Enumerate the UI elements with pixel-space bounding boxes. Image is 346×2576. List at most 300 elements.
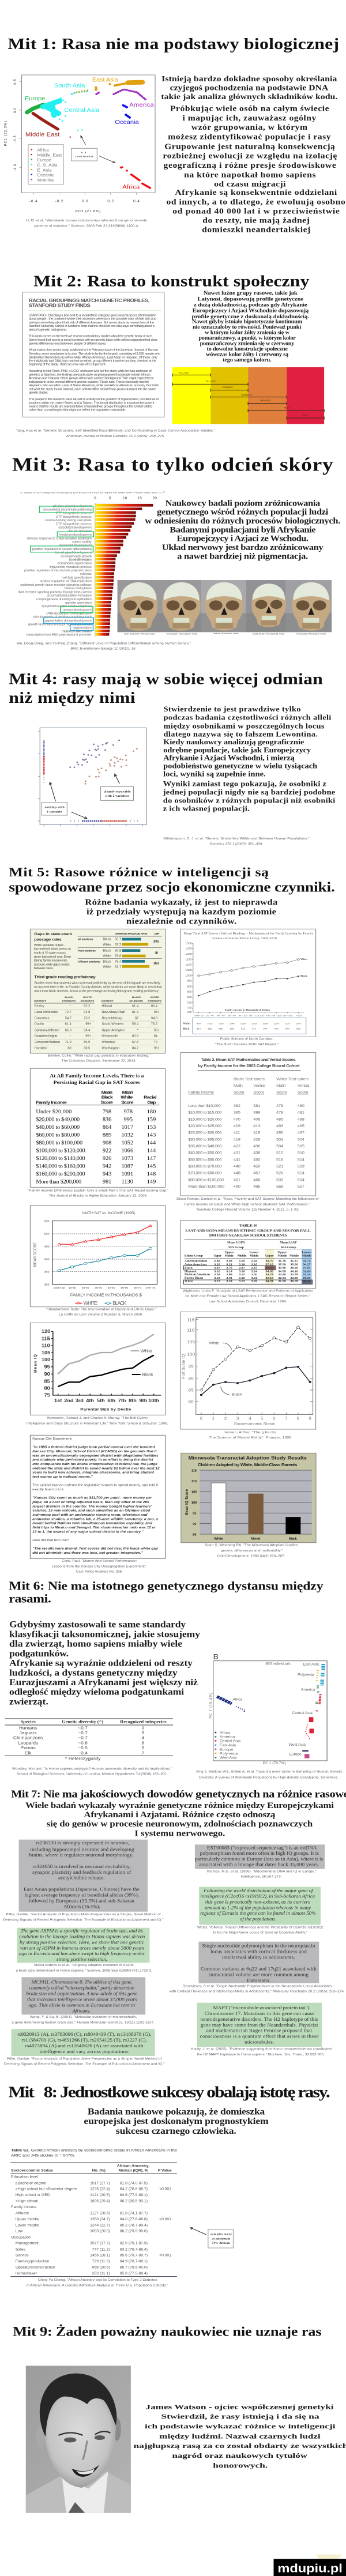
panel: Mean IQ by parental SES decile: 10th [148, 1398, 159, 1403]
table: African ancestry by socioeconomic status: 1456 (28.1) [90, 2254, 110, 2258]
panel: Gaps in state-exam passage rates: 80.6 [132, 1035, 138, 1038]
citation: Dixon-Román, Ezekiel et al. "Race, Poverty and SAT Scores: Modeling the Influences of [176, 1197, 319, 1201]
citation: Ching-Yu Cheng. "African Ancestry and Its Correlation to Type 2 Diabetes [38, 2279, 157, 2282]
panel: Stanford article: American and Hispanic ethnic groups often have a mixed background. "We might expect these [29, 377, 154, 381]
citation: Tang, Hua et al. "Genetic Structure, Self-Identified Race/Ethnicity, and Confounding in Case-Control Association Studies." [16, 430, 215, 433]
panel: North Carolina SAT line chart: 1119 [285, 1022, 290, 1025]
chart: colour continuum: RED? [284, 406, 291, 409]
panel: Table 2 SAT scores by income: 534 [298, 1178, 304, 1182]
panel: SAT gap by family income: 153 [147, 1125, 156, 1131]
panel: Stanford article [22, 292, 164, 417]
panel: Table 2 SAT scores by income: 519 [298, 1165, 304, 1169]
citation: Child Development. 1983;54(2):260–267. [217, 1555, 285, 1558]
panel: North Carolina SAT line chart: 941 [252, 1027, 256, 1030]
panel: Full scale IQ by socioeconomic status: 100 [187, 1352, 195, 1357]
text block: od czasu migracji [214, 180, 286, 189]
callout: no continuum: no [81, 151, 86, 153]
panel: ASPM: The gene ASPM is a specific regulator of brain size, and its [21, 1928, 144, 1933]
chart: GO categories bar chart: growth factor beta receptor signaling pathway [28, 623, 92, 626]
panel: North Carolina SAT line chart: White [300, 958, 308, 961]
text block: od innych, a to dlatego, że ewoluują osobno [167, 198, 345, 206]
panel: Gaps in state-exam passage rates: 61.4 [65, 1023, 72, 1026]
panel: Mean IQ by parental SES decile: 120 [42, 1329, 50, 1334]
citation [46, 1308, 156, 1317]
text block: niezależnie od czynników. [126, 917, 236, 926]
panel: Gaps in state-exam passage rates: White [103, 955, 111, 958]
panel: LSAT and UGPA table: 29.91 [303, 1276, 311, 1280]
citation [164, 837, 309, 846]
panel: Gaps in state-exam passage rates: 91.7 [115, 966, 121, 969]
panel: Table 2 SAT scores by income: 504 [276, 1144, 283, 1148]
panel: SAT gap by family income: Score [121, 1100, 134, 1105]
panel: ASPM: evolution in the lineage leading to Homo sapiens was driven [19, 1934, 145, 1939]
chart: GO categories bar chart: epidermal growth factor receptor signaling pathway [20, 583, 92, 587]
text block: Nawet gdyby istniało hipotetyczne kontinuum [192, 319, 302, 325]
table: African ancestry by socioeconomic status: 729 (11.3) [92, 2259, 110, 2264]
panel: MAPT: Chromosome 17. Mutations in this gene can cause [205, 2011, 314, 2016]
panel: North Carolina SAT line chart: 947 [263, 1027, 267, 1030]
panel: Math SAT vs income: WHITE [84, 1301, 97, 1306]
chart: Minnesota Transracial Adoption Study: 115 [191, 1470, 197, 1472]
panel: SAT gap by family income: 144 [147, 1140, 156, 1146]
panel: Gaps in state-exam passage rates: account, wide gaps persist [34, 963, 70, 966]
citation: "Standardized Tests: The Interpretation of Racial and Ethnic Gaps." [46, 1308, 156, 1311]
panel: Table 2 SAT scores by income: 490 [234, 1185, 240, 1189]
panel: C2orf16: intelligence (C2orf16 rs191912), in Sub-Saharan Africa [200, 1893, 315, 1899]
chart: GO categories bar chart: 20 [153, 496, 157, 500]
table: African ancestry by socioeconomic status: Upper middle [16, 2217, 39, 2221]
panel: Math SAT vs income: FAMILY INCOME IN THOUSANDS $ [70, 1293, 142, 1297]
panel: Kansas City Experiment: swimming pool with an underwater viewing room, television and [32, 1513, 148, 1517]
text block: Układ nerwowy jest bardzo zróżnicowany [162, 543, 324, 552]
panel: rs236330 [19, 1840, 148, 1912]
panel: Stanford article: genetic differences exist between people of different races. [29, 342, 106, 345]
text block: na które napotkał homo sapiens [184, 171, 316, 179]
panel: Gaps in state-exam passage rates: Third-grade reading proficiency [34, 975, 96, 980]
panel: LSAT and UGPA table: 3.29 [251, 1280, 257, 1283]
text block [163, 705, 335, 812]
panel: Gaps in state-exam passage rates: Reynoldsburg [101, 1017, 122, 1020]
text block: w odniesieniu do różnych procesów biologicznych. [145, 517, 341, 526]
panel: SAT gap by family income: $40,000 to $60,000 [36, 1125, 80, 1131]
citation: patterns of variation." Science. 2008 Feb 22;319(5866):1100-4. [34, 225, 139, 228]
panel: Kansas City Experiment: animation studios, a robotics lab, a 25-acre wildlife sanctuary, a zoo, a [32, 1517, 159, 1521]
callout [100, 786, 134, 800]
panel: Math SAT vs income: 500 [44, 1233, 50, 1236]
table: African ancestry by socioeconomic status: 263 (11.1) [92, 2272, 110, 2276]
panel: SAT gap by family income: Family Income [36, 1100, 67, 1105]
panel: Gaps in state-exam passage rates: WHITE [83, 996, 92, 999]
panel: SAT gap by family income: $20,000 to $40,000 [36, 1117, 80, 1123]
panel: Stanford article: What makes the current study, published in the February issue of the American Journal of Human [29, 349, 158, 352]
panel: Gaps in state-exam passage rates: 70 [154, 1041, 157, 1044]
panel: Table 2 SAT scores by income: 485 [276, 1118, 283, 1121]
panel: Stanford article: genetic cluster. [29, 391, 48, 395]
panel: LSAT and UGPA table: 34.31 [266, 1280, 273, 1283]
panel: Mean IQ by parental SES decile: 9th [139, 1398, 147, 1403]
panel: Kansas City Experiment: ordered the state and district to spend nearly $2 billion over the next 12 [32, 1467, 160, 1470]
citation [191, 2048, 332, 2057]
panel: Table 2 SAT scores by income: Math [276, 1083, 285, 1088]
panel: North Carolina SAT line chart: 1069 [240, 1022, 246, 1025]
panel: Table 2 SAT scores by income: 426 [253, 1138, 261, 1142]
chart: GO categories bar chart: positive regulation of microtubule polymerization [24, 569, 92, 573]
panel: LSAT and UGPA table: 34.55 [278, 1270, 286, 1273]
citation [52, 1560, 147, 1574]
table: African ancestry by socioeconomic status: 1517 (27.7) [90, 2182, 110, 2185]
text block: domieszki neandertalskiej [202, 226, 310, 234]
panel: rs236330: rs324650 is involved in neuronal excitability, [33, 1864, 131, 1869]
panel: North Carolina SAT line chart: 800 [187, 996, 192, 999]
title: Mit 5: spowodowane przez socjo ekonomiczne czynniki. [9, 879, 335, 895]
table: African ancestry by socioeconomic status: 85.8 (77.5-89.4) [120, 2272, 148, 2276]
table: African ancestry by socioeconomic status: 82.5 (75.1-87.9) [120, 2242, 148, 2246]
chart: PCA scatter B: America [301, 1688, 315, 1692]
panel: MAPT: microtubules. [245, 2039, 274, 2044]
citation: Teachers College Record Volume 115 Number 4, 2013, p. 1-33. [196, 1208, 299, 1212]
citation: Witherspoon, D. J. et al. "Genetic Similarities Within and Between Human Populations." [164, 837, 309, 841]
panel: Gaps in state-exam passage rates: Black [103, 938, 111, 941]
citation: Detecting Signals of Recent Polygenic Selection: The Example of Educational Attainment and IQ." [4, 2063, 164, 2066]
panel: Kansas City Experiment: years to build new schools, integrate classrooms, and bring student [32, 1471, 155, 1475]
text block: honorowych. [213, 2461, 268, 2469]
panel: Gaps in state-exam passage rates: Whitehall [101, 1041, 115, 1044]
text block: profile genetyczne z doskonalą dokładnością. [192, 314, 310, 320]
table: species diversity: 7 [142, 1750, 144, 1756]
panel: LSAT and UGPA table: 3.19 [239, 1263, 245, 1267]
panel: Stanford article: Hispanics who are often a mix of Native American, white and African-American ancestry. But that's [29, 384, 159, 387]
panel: Math SAT vs income: under 10 [54, 1286, 65, 1289]
title: Mit 7: Mit 7: Nie ma jakościowych dowodów genetycznych na różnice rasowe [11, 1788, 346, 1800]
legend: Europe [37, 157, 51, 163]
chart: PCA scatter of world populations: South Asia [54, 83, 85, 89]
table: African ancestry by socioeconomic status: 85.2 (78.7-89.4) [120, 2224, 148, 2227]
chart: GO categories bar chart: triglyceride metabolic process [50, 566, 92, 569]
citation: American Journal of Human Genetics 76.2 (2005): 268–275. [66, 435, 165, 438]
panel: LSAT and UGPA table: Ethnic Group [185, 1255, 203, 1257]
panel: Kansas City Experiment: did not diminish; and there was less, not greater, integration." [32, 1551, 143, 1555]
panel: Full scale IQ by socioeconomic status: 0 [200, 1416, 203, 1421]
panel: Math SAT vs income: 450 [44, 1245, 50, 1248]
text block: Różne badania wykazały, iż jest to nieprawda [85, 898, 277, 907]
panel: SAT gap by family income: Mean [101, 1090, 112, 1095]
citation [16, 1964, 152, 1973]
chart: PCA scatter of world populations: PC1 (52.3%) [3, 121, 8, 146]
text block: do reszty, nie mają żadnej [202, 217, 310, 225]
citation [16, 430, 215, 438]
panel: Full scale IQ by socioeconomic status: 6 [273, 1416, 276, 1421]
chart: Minnesota Transracial Adoption Study: 110 [191, 1480, 197, 1483]
panel: Kansas City Experiment [30, 1435, 166, 1558]
panel: LSAT and UGPA table: 2.99 [226, 1273, 232, 1276]
panel: LSAT and UGPA table: 3.03 [214, 1276, 220, 1280]
panel: LSAT and UGPA table: 3.14 [251, 1270, 257, 1273]
citation: Intelligence and Class Structure in American Life." New York: Simon & Schuster, 1996. [27, 1422, 168, 1425]
panel: C2orf16 [199, 1887, 321, 1925]
panel: LSAT and UGPA table: 2.87 [214, 1267, 220, 1270]
citation: Herrnstein, Richard J, and Charles A. Murray. "The Bell Curve: [47, 1417, 148, 1420]
title: Mit 6: rasami. [9, 1592, 51, 1605]
panel: LSAT and UGPA table: 3.08 [214, 1273, 220, 1276]
text block: z dużą dokładnością, podczas gdy Afrykanie [194, 302, 307, 308]
image: portrait of James Watson [26, 2366, 131, 2513]
table: African ancestry by socioeconomic status: Occupation [11, 2236, 31, 2239]
panel: LSAT and UGPA table [180, 1221, 316, 1289]
panel: LSAT and UGPA table: 2.94 [251, 1260, 257, 1263]
text block [25, 1801, 334, 1838]
citation: Family Income on Black and White High School Students' SAT Performance." [185, 1203, 310, 1206]
panel: Table 2 SAT scores by income: 413 [253, 1124, 261, 1128]
legend: Europe [220, 1748, 233, 1752]
panel: Gaps in state-exam passage rates: Black [103, 961, 111, 963]
panel: rs236330: followed by Europeans (35.5%) and sub-Saharan [29, 1898, 135, 1903]
panel: Table 2 SAT scores by income: 400 [234, 1118, 240, 1121]
callout: no continuum [72, 148, 97, 161]
table: species diversity: 8 [142, 1741, 145, 1745]
chart: GO categories bar chart: 10 [123, 496, 127, 500]
table: African ancestry by socioeconomic status: 84.0 (77.8-88.8) [120, 2217, 148, 2221]
panel: LSAT and UGPA table: Middle [238, 1255, 247, 1257]
panel: Gaps in state-exam passage rates: Hilliard [101, 1005, 112, 1008]
citation: Binkley, Collin. "Wide racial gap persists in education testing." [48, 1054, 151, 1057]
panel: North Carolina SAT line chart: 1149 [296, 1022, 301, 1025]
panel: Stanford article: perhaps something about their risk of different diseases. But a new study by researchers at the [29, 321, 154, 325]
panel: LSAT and UGPA table: Upper- [277, 1251, 287, 1255]
panel: North Carolina SAT line chart: 973 [274, 1027, 279, 1030]
panel: Table 2 SAT scores by income: 488 [298, 1118, 304, 1121]
citation: Detecting Signals of Recent Polygenic Selection: The Example of Educational Attainment and IQ." [3, 1919, 164, 1922]
title: Mit 6 [9, 1579, 324, 1605]
chart: Minnesota Transracial Adoption Study: Mean IQ Score [185, 1489, 189, 1515]
chart: GO categories bar chart: gamete generation [65, 601, 92, 605]
panel: Full scale IQ by socioeconomic status: White [209, 1341, 219, 1346]
citation: Piffer, Davide. "Factor Analysis of Population Allele Frequencies as a Simple, Novel Method of [7, 2058, 161, 2061]
chart: PCA scatter of world populations: 0.5 [13, 79, 17, 85]
text block: podgatunków. [9, 1648, 69, 1659]
panel: Mean IQ by parental SES decile: 2nd [64, 1398, 74, 1403]
image: five skulls: European Caucasian male [167, 632, 198, 635]
text block: podobieństwo genetyczne w wielu tysiącach [163, 762, 318, 770]
chart: PCA scatter of world populations: Middle East [25, 132, 59, 138]
chart: PCA scatter B: Central Asia [292, 1711, 313, 1715]
panel: Mean IQ by parental SES decile [30, 1323, 166, 1415]
panel: Full scale IQ by socioeconomic status: Full Scale IQ [181, 1354, 186, 1379]
text block: od ponad 40 000 lat i w przeciwieństwie [172, 208, 340, 216]
panel: LSAT and UGPA table: 32.15 [266, 1276, 273, 1280]
panel: SAT gap by family income: Under $20,000 [36, 1109, 72, 1115]
panel: LSAT and UGPA table: 27.51 [303, 1267, 311, 1270]
panel: Gaps in state-exam passage rates: formed their black peers on [34, 948, 71, 951]
panel: Table 2 SAT scores by income: $20,000 to $25,000 [188, 1124, 222, 1128]
chart: PCA scatter of world populations: -0.4 [29, 199, 37, 204]
panel: Mean IQ by parental SES decile: 5th [97, 1398, 105, 1403]
title: Mit 8: Mit 8: Jednostkowe sukcesy obalają istotę rasy. [9, 2083, 330, 2101]
table: African ancestry by socioeconomic status: 1121 (20.5) [90, 2193, 110, 2197]
table: African ancestry by socioeconomic status: Education level [11, 2175, 38, 2179]
table: African ancestry by socioeconomic status: P Value [158, 2169, 172, 2173]
panel: North Carolina SAT line chart: 750 [187, 1001, 192, 1004]
text block: Naukowcy badali poziom zróżnicowania [166, 499, 321, 508]
panel: LSAT and UGPA table: 2.87 [239, 1267, 245, 1270]
text block: Wiele badań wykazały wyraźnie genetyczne różnice między Europejczykami [25, 1801, 334, 1810]
panel: LSAT and UGPA table: 33.80 [278, 1273, 286, 1276]
panel: North Carolina SAT line chart: 999 [197, 1022, 201, 1025]
panel: SAT gap by family income: More than $200,000 [36, 1179, 81, 1185]
text block: Grupowanie jest naturalną konsekwencją [164, 142, 336, 151]
panel: SAT gap by family income: $60,000 to $80,000 [36, 1132, 80, 1138]
panel: SAT gap by family income [30, 1068, 166, 1187]
panel: Table 2 SAT scores by income: Score [298, 1090, 309, 1095]
text block: dlatego nazywa się to fałszem Lewontina. [164, 730, 318, 738]
callout: samples were at minimum 74% African: at minimum [212, 2238, 231, 2240]
arrow [99, 156, 115, 163]
panel: Table 2 SAT scores by income: 448 [234, 1172, 240, 1176]
panel: Table 2 SAT scores by income: 493 [276, 1124, 283, 1128]
chart: colour continuum: ORANGE? [222, 386, 234, 389]
panel: Table 2 SAT scores by income: Less than $10,000 [188, 1104, 221, 1108]
text block: czyjegoś pochodzenia na podstawie DNA [170, 84, 329, 92]
panel: ASPM: by strong positive selection. Here, we show that one genetic [20, 1939, 144, 1945]
text block: ludzkości, a dystans genetyczny między [9, 1667, 178, 1678]
panel: LSAT and UGPA table: 2.87 [251, 1267, 257, 1270]
chart: colour continuum: YELLOW? [178, 371, 190, 374]
panel: Kansas City Experiment: "Kansas City spent as much as $11,700 per pupil - more money per [32, 1496, 152, 1500]
panel: Stanford article: means that the results are representative of racial/ethnic groups throughout the United States [29, 405, 152, 409]
chart: PCA scatter B: Polynesia [298, 1673, 314, 1677]
panel: Gaps in state-exam passage rates: Hamilton [35, 1047, 47, 1050]
chart: PCA scatter B: PC 1 (78.7%) [263, 1761, 286, 1765]
panel: SAT gap by family income: $160,000 to $200,000 [36, 1172, 85, 1177]
panel: Gaps in state-exam passage rates: 95+ [85, 1035, 91, 1038]
panel: SAT gap by family income: 1032 [121, 1132, 133, 1138]
citation [12, 1768, 172, 1776]
panel: SAT gap by family income: $80,000 to $100,000 [36, 1140, 82, 1146]
panel: North Carolina SAT line chart: 700 [187, 1007, 192, 1010]
text block: możesz zidentyfikować populacje i rasy [168, 133, 331, 141]
legend: Oceania [37, 172, 54, 178]
text block: dla zwierząt, homo sapiens miałby wiele [9, 1639, 182, 1649]
panel: LSAT and UGPA table: American Indian [185, 1260, 207, 1263]
table: African ancestry by socioeconomic status: <0.001 [159, 2217, 171, 2221]
chart: GO categories bar chart: pigmentation during development [45, 619, 92, 623]
citation: Lessons from the Kansas City Desegregation Experiment". [52, 1565, 147, 1568]
table: species diversity: 4 [142, 1735, 145, 1741]
table: species diversity: ~0.5 [78, 1745, 88, 1750]
text block: nie oznaczałoby to równości. Ponieważ punkt [193, 325, 302, 330]
panel: North Carolina SAT line chart: Family Income in Thousands of Dollars [225, 1008, 270, 1011]
panel: Gaps in state-exam passage rates: Black [103, 950, 111, 952]
panel: LSAT and UGPA table: 37.16 [266, 1263, 273, 1267]
panel: rs236330: Africans (16.4%). [63, 1904, 100, 1909]
panel: Gaps in state-exam passage rates: to succeed later in life. In Franklin County districts, white students are more likely to reach that [34, 986, 162, 989]
panel: Math SAT vs income: over 70 [146, 1286, 156, 1289]
text block [161, 75, 345, 234]
panel: Table 2 SAT scores by income: 495 [298, 1124, 304, 1128]
panel: Kansas City Experiment: Kansas City Experiment. [32, 1437, 73, 1441]
panel: EST00083: polymorphism found more often in high IQ groups. It is [200, 1851, 319, 1856]
section: Mit 9 [13, 2324, 346, 2576]
panel: Gaps in state-exam passage rates: White students outper- [34, 944, 65, 947]
panel: rs236330: acetylcholine release. [58, 1875, 104, 1881]
citation: Xing J, Watkins WS, Shlien A, et al. Toward a more Uniform Sampling of Human Genetic [196, 1771, 343, 1774]
legend: C_S_Asia [37, 163, 58, 168]
panel: rs236330: brains, where it regulates neuronal morphology. [29, 1852, 133, 1858]
text block: Badania naukowe pokazują, że domieszka [88, 2106, 265, 2116]
panel: LSAT and UGPA table: 3.00 [251, 1273, 257, 1276]
text block [85, 898, 277, 926]
table: species diversity: ~0.7 [78, 1730, 88, 1735]
panel: LSAT and UGPA table: SES Group [281, 1246, 296, 1249]
panel: Math SAT vs income: MEAN SCORE [33, 1242, 37, 1267]
table: species diversity: 0 [142, 1726, 145, 1730]
citation: Desrivières, S et al. "Single Nucleotide Polymorphism in the Neuroplastin Locus Associates [183, 1985, 332, 1988]
panel: EST00083: associated with a lineage that dates back 35,000 years. [199, 1862, 319, 1867]
panel: MCPH1: MCPH1. Chromosome 8. The alleles of this gene, [31, 1979, 133, 1985]
panel: Gaps in state-exam passage rates: STUDENTS [129, 1000, 143, 1002]
panel: North Carolina SAT line chart: 1200 [185, 952, 192, 955]
citation: a brain size determinant in Homo sapiens." Science. 2005 Sep 9;309(5741):1720-2. [16, 1969, 152, 1973]
citation: Wang, Y. & Su, B. (2004). "Molecular evolution of microcephalin, [30, 2016, 137, 2019]
title: Mit 3: Mit 3: Rasa to tylko odcień skóry [12, 454, 333, 475]
panel: Stanford article: about people - the continent where their ancestors were born, the possible color of their skin and [29, 318, 156, 321]
panel: Gaps in state-exam passage rates: given last school year. Even [34, 955, 71, 959]
panel: Table 2 SAT scores by income: 480 [298, 1104, 304, 1108]
chart: GO categories bar chart: histone methylation [65, 587, 92, 590]
citation: genetic differences and malleability." [221, 1549, 283, 1553]
section: Mit 5 end and Mit 6 title [9, 1435, 324, 1605]
panel: Table 2 SAT scores by income: 510 [298, 1151, 304, 1155]
panel: Table 2 SAT scores by income: 504 [298, 1138, 304, 1142]
panel: North Carolina SAT line chart: 1000 [185, 974, 192, 977]
panel: Table 2 SAT scores by income: 495 [276, 1131, 283, 1135]
text block: Eurazjuszami a Afrykanami jest większy niż [9, 1677, 198, 1688]
panel: Table 2 SAT scores by income: 398 [253, 1111, 261, 1115]
panel: Gaps in state-exam passage rates: STUDENTS [62, 1000, 76, 1002]
table: species diversity: Pumas [21, 1745, 36, 1750]
chart: PCA scatter B [209, 1652, 327, 1765]
chart: GO categories bar chart: pituitary gland development [53, 505, 92, 508]
panel: SAT gap by family income: Persisting Racial Gap in SAT Scores [54, 1080, 140, 1086]
panel: LSAT and UGPA table: 33.78 [290, 1273, 298, 1276]
citation: Piffer, Davide. "Factor Analysis of Population Allele Frequencies as a Simple, Novel Method of [6, 1913, 161, 1916]
citation: Li JZ et al. "Worldwide human relationships inferred from genome-wide [26, 219, 148, 223]
panel: Full scale IQ by socioeconomic status [180, 1312, 316, 1429]
panel: Math SAT vs income: 40-50 [108, 1286, 115, 1289]
panel: Math SAT vs income: 300 [44, 1283, 50, 1286]
title: Mit 4: Mit 4: rasy mają w sobie więcej odmian [9, 671, 323, 688]
table: African ancestry by socioeconomic status: Socioeconomic Status [11, 2169, 53, 2173]
panel: C2orf16: regions of Eurasia the gene can be found in almost 50% [200, 1911, 316, 1916]
callout: cleanly separable [104, 790, 131, 793]
panel: Table 2 SAT scores by income: 497 [298, 1131, 304, 1135]
panel: North Carolina SAT line chart: 160 - 200 [282, 1014, 293, 1017]
text block: Latynosi, dopasowują profile genetyczne [197, 296, 304, 302]
panel: Table 2 SAT scores by income: $70,000 to $80,000 [188, 1172, 222, 1176]
panel: Mean IQ by parental SES decile: 105 [42, 1350, 50, 1355]
panel: Gaps in state-exam passage rates: Studies show that students who can't read proficiently by the end of third grade are less likely [34, 982, 161, 985]
panel: ASPM: variant of ASPM in humans arose merely about 5800 years [20, 1945, 145, 1950]
text block: loci, wyniki są zupełnie inne. [163, 770, 266, 778]
panel: Stanford article: beginning of the study. That's an error rate of 0.14 percent. [29, 363, 106, 367]
panel: C2orf16: of the population. [240, 1916, 276, 1922]
panel: Mean IQ by parental SES decile: Black [142, 1372, 153, 1377]
text block: Gdybyśmy zastosowali te same standardy [9, 1620, 186, 1629]
panel: Full scale IQ by socioeconomic status: 90 [188, 1376, 194, 1381]
panel: Mean IQ by parental SES decile: 85 [44, 1379, 50, 1384]
text block: nagród oraz naukowych tytułów [172, 2451, 308, 2460]
panel: SAT gap by family income: 144 [147, 1148, 156, 1154]
chart: colour continuum: RED? [302, 414, 309, 416]
